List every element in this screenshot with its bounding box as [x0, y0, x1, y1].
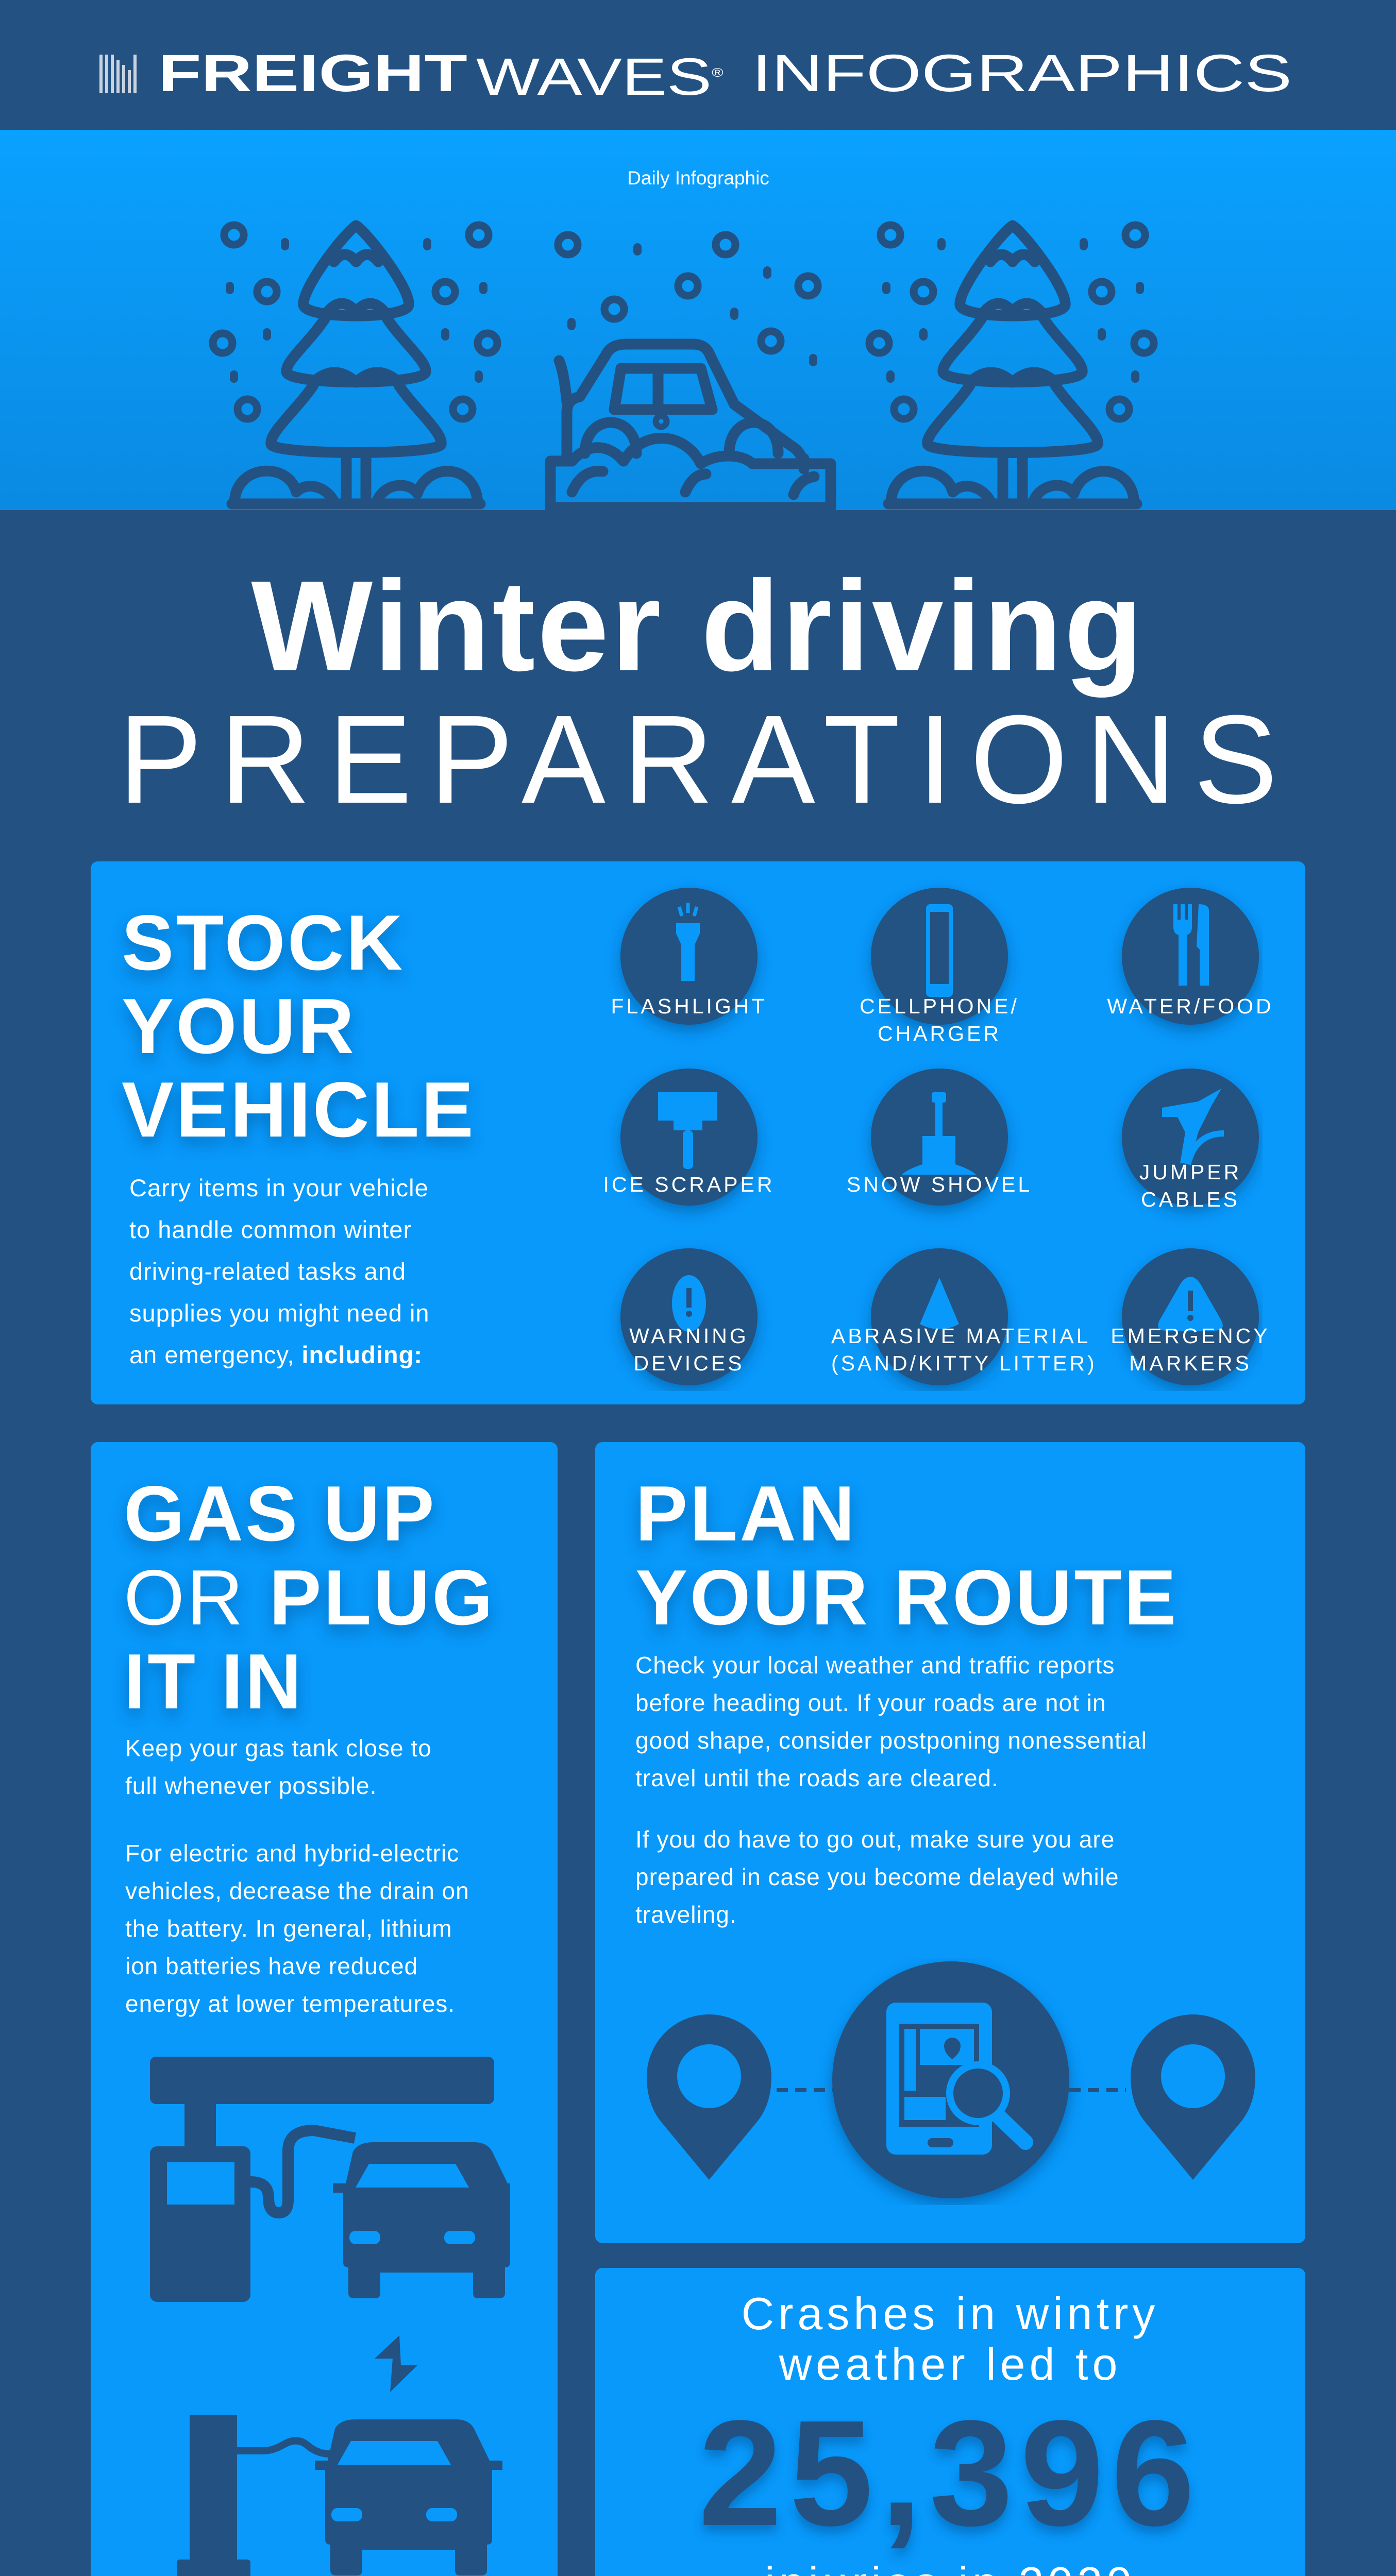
labels: stock items: DEVICES [634, 1351, 744, 1375]
heading: gas up: OR PLUG [124, 1554, 495, 1641]
labels: stock items: WATER/FOOD [1107, 994, 1274, 1018]
text: stock description [129, 1174, 430, 1368]
icon: emergency marker [1158, 1277, 1223, 1331]
icon: phone [926, 904, 953, 997]
text: plan body 2: traveling. [635, 1901, 737, 1928]
labels: stock items: CELLPHONE/ [860, 994, 1019, 1018]
text: plan body 2: If you do have to go out, make sure you are [635, 1826, 1115, 1853]
labels: stock items: (SAND/KITTY LITTER) [831, 1351, 1097, 1375]
logo: INFOGRAPHICS [752, 44, 1292, 103]
text: electric body: vehicles, decrease the drain on [125, 1877, 469, 1904]
text: electric body [125, 1840, 469, 2017]
heading: stock your vehicle: STOCK [122, 899, 405, 987]
labels: stock items: CHARGER [878, 1022, 1001, 1045]
text: electric body: For electric and hybrid-electric [125, 1840, 459, 1867]
text: electric body: the battery. In general, lithium [125, 1915, 452, 1942]
text: stock description: driving-related tasks and [129, 1258, 406, 1285]
text: plan body 1: travel until the roads are cleared. [635, 1765, 999, 1791]
logo icon [99, 55, 137, 93]
hero illustration [209, 220, 1157, 510]
panel: stock your vehicle [91, 861, 1305, 1404]
logo [99, 44, 1292, 106]
title: PREPARATIONS [119, 689, 1295, 829]
heading: plan your route: PLAN [635, 1470, 857, 1557]
icon: flashlight [676, 903, 700, 981]
subtitle: Daily Infographic [627, 167, 769, 189]
text: gas body: Keep your gas tank close to [125, 1735, 432, 1761]
panel: plan your route [595, 1442, 1305, 2243]
text: plan body 1: good shape, consider postponing nonessential [635, 1727, 1147, 1754]
heading: gas up: GAS UP [124, 1470, 436, 1557]
header bar [0, 0, 1396, 130]
icon: warning device [672, 1275, 706, 1332]
icon: abrasive pile [920, 1278, 959, 1329]
text: crashes lead-in [742, 2288, 1159, 2389]
icon: gas pump and car [150, 2057, 510, 2576]
labels: stock items: WARNING [629, 1324, 749, 1348]
heading: plan your route: YOUR ROUTE [635, 1554, 1178, 1641]
heading: plan your route [633, 1470, 1178, 1641]
text: electric body: ion batteries have reduced [125, 1953, 418, 1979]
text: stock description: to handle common winter [129, 1216, 412, 1243]
text: stock description: supplies you might need in [129, 1299, 430, 1327]
heading: gas up: IT IN [124, 1638, 304, 1725]
text: plan body 1: before heading out. If your roads are not in [635, 1689, 1106, 1716]
text: plan body 1: Check your local weather and traffic reports [635, 1652, 1115, 1679]
icon: car in snow [550, 344, 831, 507]
text: stock description: Carry items in your vehicle [129, 1174, 429, 1201]
icon: fork and knife [1173, 904, 1209, 986]
labels: stock items: FLASHLIGHT [611, 994, 767, 1018]
text: electric body: energy at lower temperatures. [125, 1990, 455, 2017]
logo: WAVES® [476, 47, 724, 106]
text: gas body [125, 1735, 432, 1799]
panel: gas up or plug it in [91, 1442, 558, 2576]
icon: route map [647, 1960, 1255, 2205]
labels: stock items: MARKERS [1129, 1351, 1252, 1375]
labels: stock items: SNOW SHOVEL [847, 1173, 1032, 1196]
icon: shovel [902, 1092, 976, 1175]
heading: stock your vehicle: YOUR [122, 982, 356, 1070]
heading: stock your vehicle: VEHICLE [122, 1066, 476, 1154]
heading: gas up [120, 1470, 495, 1725]
text: crashes lead-in: weather led to [779, 2338, 1121, 2389]
text: plan body 2: prepared in case you become delayed while [635, 1863, 1119, 1890]
labels: stock items: EMERGENCY [1111, 1324, 1270, 1348]
hero band [0, 130, 1396, 510]
icon: snowflakes [213, 225, 1154, 419]
labels: stock items [603, 994, 1274, 1375]
title: Winter driving [251, 554, 1145, 698]
panel: crash statistic [595, 2268, 1305, 2576]
text: stock description: an emergency, including: [129, 1341, 423, 1368]
icon: right tree [888, 226, 1137, 504]
text: gas body: full whenever possible. [125, 1772, 377, 1799]
icons: stock items [613, 887, 1263, 1391]
labels: stock items: ABRASIVE MATERIAL [831, 1324, 1090, 1348]
labels: stock items: ICE SCRAPER [603, 1173, 775, 1196]
title [119, 554, 1295, 829]
stat number: 25,396 [698, 2389, 1202, 2557]
icon: jumper cables [1162, 1089, 1224, 1164]
text: plan body 1 [635, 1652, 1147, 1791]
icon: left tree [232, 226, 480, 504]
labels: stock items: CABLES [1141, 1188, 1240, 1211]
text: plan body 2 [635, 1826, 1119, 1928]
logo: FREIGHT [158, 44, 467, 103]
labels: stock items: JUMPER [1139, 1160, 1241, 1184]
text: crashes lead-in: Crashes in wintry [742, 2288, 1159, 2339]
heading: stock your vehicle [119, 899, 476, 1154]
icon: ice scraper [658, 1092, 717, 1169]
